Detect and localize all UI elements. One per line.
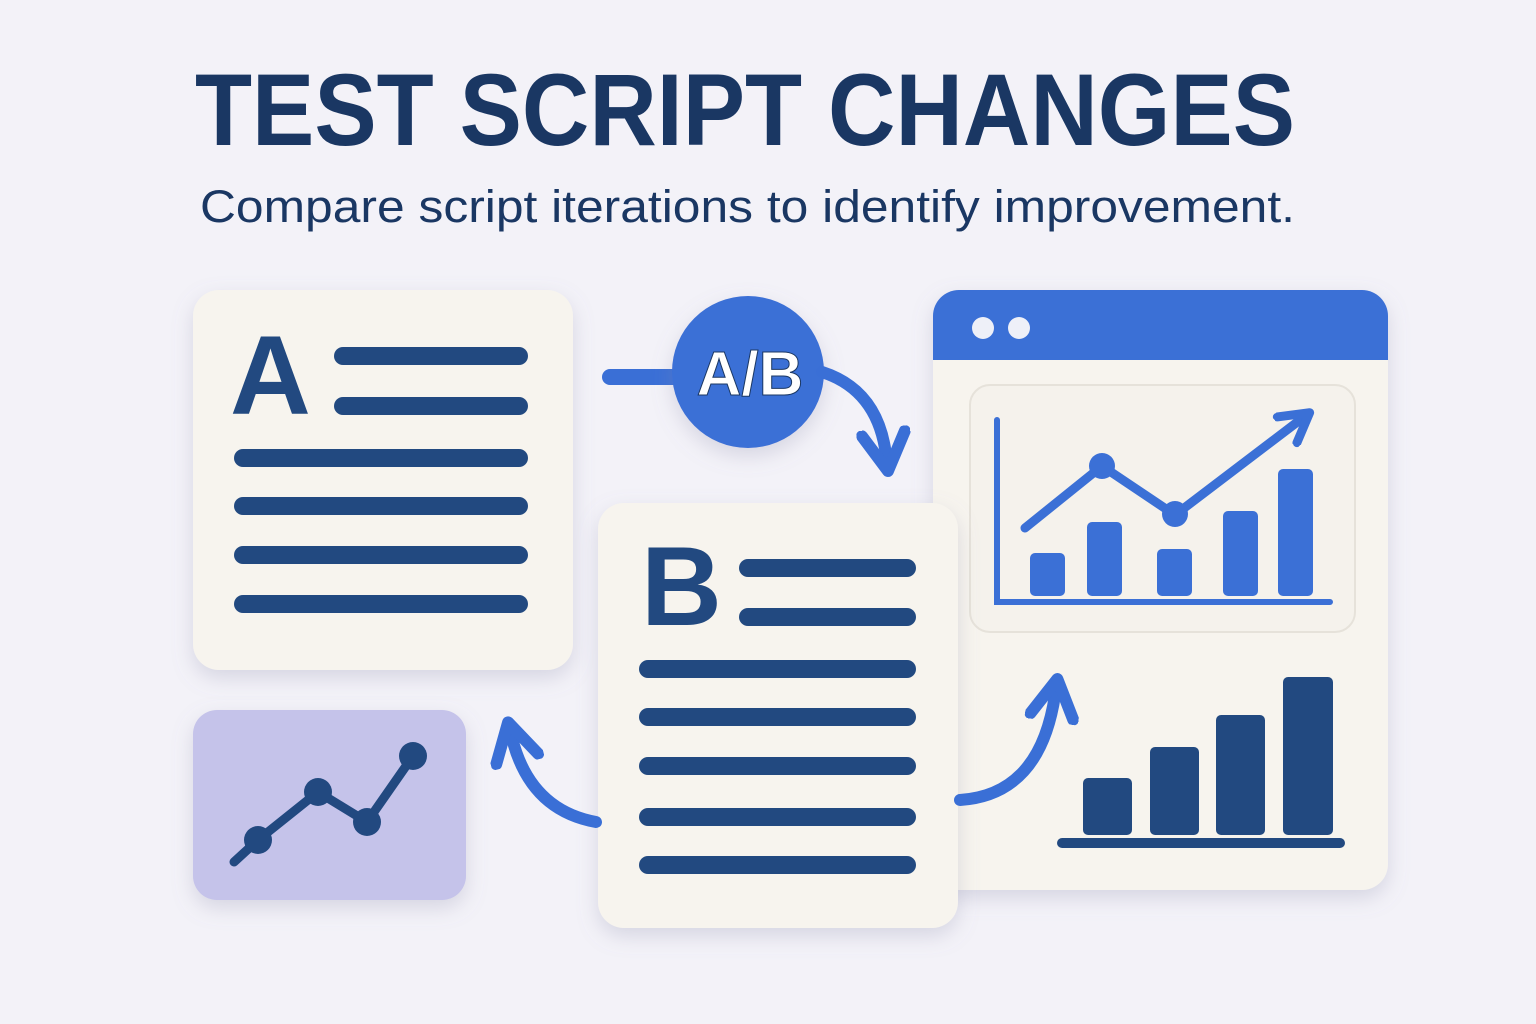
card B [598, 503, 958, 928]
arrow B to bar chart [960, 695, 1055, 800]
browser window [933, 290, 1388, 890]
card A [193, 290, 573, 670]
arrow A/B to chart [822, 372, 886, 455]
card B: B [641, 524, 722, 649]
A/B badge: A/B [697, 340, 803, 409]
card A: A [230, 313, 311, 438]
title: TEST SCRIPT CHANGES [195, 53, 1295, 167]
A/B badge [672, 296, 824, 448]
bottom bar chart [1057, 677, 1345, 848]
connector line to A/B [610, 369, 680, 385]
arrow B to trend card [512, 738, 596, 822]
subtitle: Compare script iterations to identify improvement. [200, 181, 1295, 232]
trend card [193, 710, 466, 900]
inner chart panel [970, 385, 1355, 632]
